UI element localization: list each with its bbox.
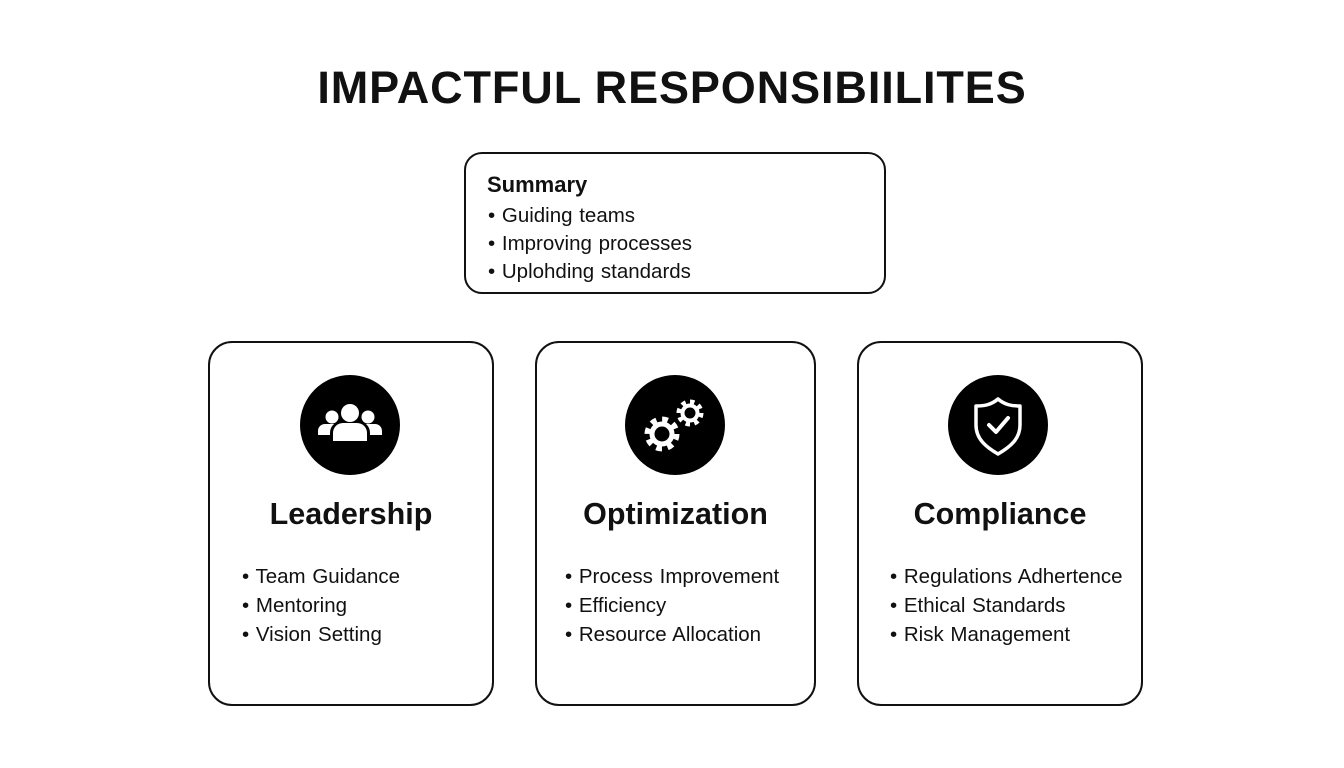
heading: compliance: Compliance bbox=[914, 497, 1086, 531]
summary bullets: • Uplohding standards bbox=[488, 260, 691, 283]
summary bullets: • Guiding teams bbox=[488, 204, 635, 227]
heading: leadership: Leadership bbox=[270, 497, 432, 531]
bullets: leadership: • Team Guidance bbox=[242, 565, 400, 588]
bullets: compliance: • Regulations Adhertence bbox=[890, 565, 1123, 588]
icon: gears bbox=[625, 375, 725, 475]
bullets: leadership bbox=[242, 565, 400, 646]
title: IMPACTFUL RESPONSIBIILITES bbox=[317, 62, 1027, 113]
bullets: optimization bbox=[565, 565, 780, 646]
panel: compliance bbox=[857, 341, 1143, 706]
bullets: optimization: • Efficiency bbox=[565, 594, 666, 617]
bullets: compliance bbox=[890, 565, 1123, 646]
icon: people bbox=[300, 375, 400, 475]
bullets: leadership: • Mentoring bbox=[242, 594, 347, 617]
bullets: optimization: • Resource Allocation bbox=[565, 623, 761, 646]
summary bullets bbox=[488, 204, 692, 283]
icon: shield bbox=[948, 375, 1048, 475]
bullets: compliance: • Ethical Standards bbox=[890, 594, 1066, 617]
bullets: optimization: • Process Improvement bbox=[565, 565, 779, 588]
summary bullets: • Improving processes bbox=[488, 232, 692, 255]
bullets: compliance: • Risk Management bbox=[890, 623, 1070, 646]
bullets: leadership: • Vision Setting bbox=[242, 623, 382, 646]
panel: optimization bbox=[535, 341, 816, 706]
heading: optimization: Optimization bbox=[583, 497, 768, 531]
panel: leadership bbox=[208, 341, 494, 706]
summary heading: Summary bbox=[487, 172, 587, 197]
panel: summary bbox=[464, 152, 886, 294]
